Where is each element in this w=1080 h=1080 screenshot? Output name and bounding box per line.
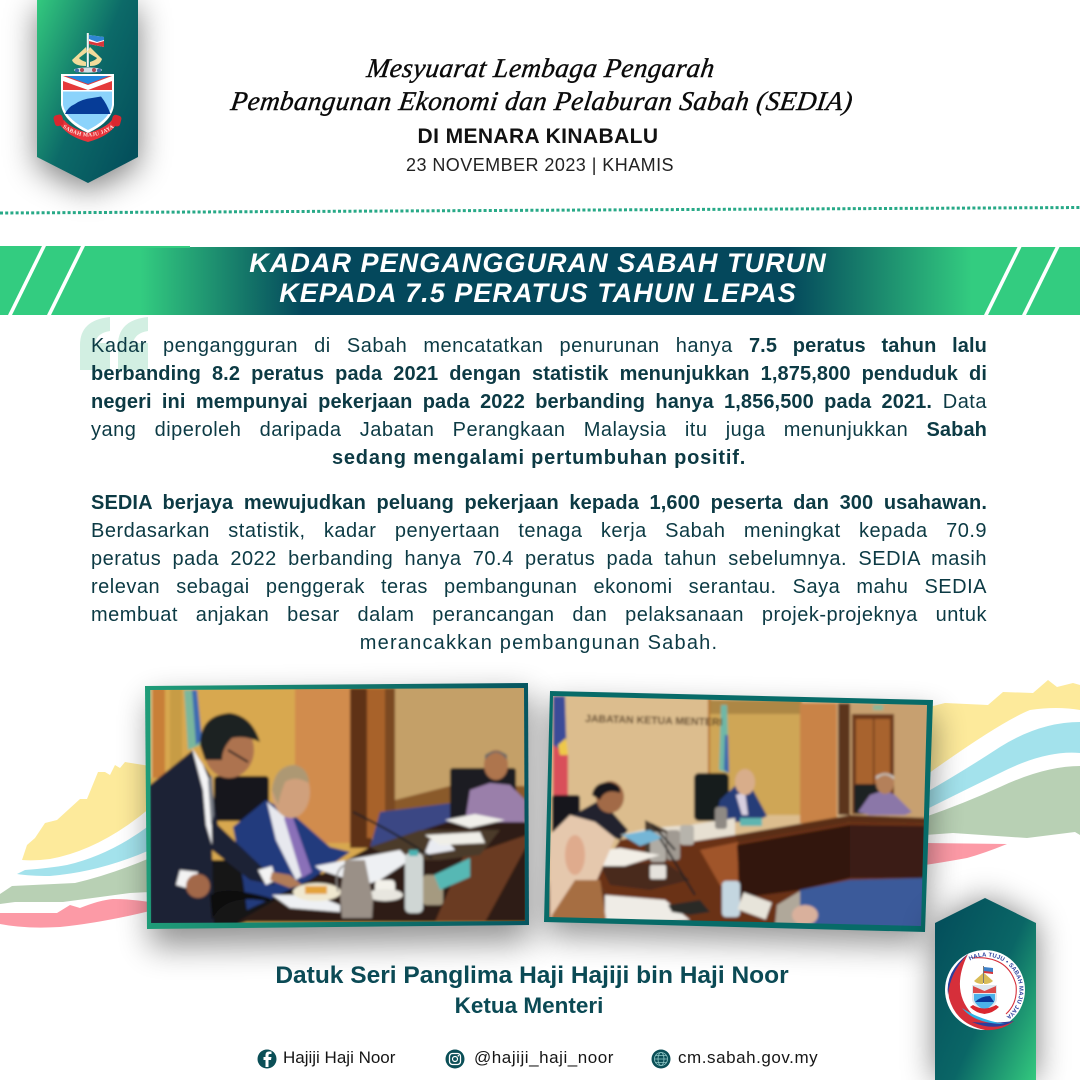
dotted divider (0, 208, 1080, 213)
photo 1 shadow (150, 695, 530, 947)
signature name: Datuk Seri Panglima Haji Hajiji bin Haji Noor (275, 962, 789, 989)
top ribbon with crest (14, 0, 161, 208)
paragraph 1: sedang mengalami pertumbuhan positif. (332, 447, 746, 469)
icon: Sabah crest (54, 33, 122, 142)
icon: quotation mark (80, 317, 148, 370)
left waves (0, 762, 150, 928)
website: cm.sabah.gov.my (678, 1048, 818, 1067)
title script lines: Pembangunan Ekonomi dan Pelaburan Sabah (SEDIA) (229, 86, 855, 116)
paragraph 1: berbanding 8.2 peratus pada 2021 dengan statistik menunjukkan 1,875,800 penduduk di (91, 363, 987, 385)
banner headline: KEPADA 7.5 PERATUS TAHUN LEPAS (279, 278, 797, 308)
photo 2: boardroom table (545, 690, 935, 930)
signature role: Ketua Menteri (455, 993, 603, 1018)
icon: Sabah crest: SABAH MAJU JAYA (63, 124, 114, 136)
date line: 23 NOVEMBER 2023 | KHAMIS (406, 155, 674, 175)
photo 2 shadow (545, 705, 935, 945)
paragraph 1: yang diperoleh daripada Jabatan Perangkaan Malaysia itu juga menunjukkan Sabah (91, 419, 987, 441)
paragraph 2 (91, 492, 987, 654)
icon: instagram (446, 1050, 464, 1068)
photo 1 frame (145, 683, 529, 929)
venue heading: DI MENARA KINABALU (418, 125, 658, 148)
paragraph 1: negeri ini mempunyai pekerjaan pada 2022 berbanding hanya 1,856,500 pada 2021. Data (91, 391, 987, 413)
icon: globe (652, 1050, 670, 1068)
paragraph 2: relevan sebagai penggerak teras pembangunan ekonomi serantau. Saya mahu SEDIA (91, 576, 987, 598)
bottom ribbon with seal (912, 881, 1059, 1080)
icon: facebook (258, 1050, 276, 1068)
paragraph 2: Berdasarkan statistik, kadar penyertaan tenaga kerja Sabah meningkat kepada 70.9 (91, 520, 987, 542)
paragraph 2: membuat anjakan besar dalam perancangan dan pelaksanaan projek-projeknya untuk (91, 604, 987, 626)
right waves (925, 680, 1080, 865)
instagram handle: @hajiji_haji_noor (474, 1048, 614, 1067)
banner headline (249, 248, 827, 308)
icon: Hala Tuju seal: HALA TUJU • SABAH MAJU JAYA (968, 952, 1024, 1019)
paragraph 1 (91, 335, 987, 469)
title banner (0, 246, 1080, 315)
paragraph 2: merancakkan pembangunan Sabah. (360, 632, 718, 654)
paragraph 2: SEDIA berjaya mewujudkan peluang pekerjaan kepada 1,600 peserta dan 300 usahawan. (91, 492, 987, 514)
paragraph 1: Kadar pengangguran di Sabah mencatatkan penurunan hanya 7.5 peratus tahun lalu (91, 335, 987, 357)
wall sign lettering: JABATAN KETUA MENTERI (585, 713, 723, 729)
banner headline: KADAR PENGANGGURAN SABAH TURUN (249, 248, 827, 278)
photo 2 frame (544, 691, 933, 932)
title script lines (229, 53, 855, 116)
facebook handle: Hajiji Haji Noor (283, 1048, 395, 1067)
paragraph 2: peratus pada 2022 berbanding hanya 70.4 peratus pada tahun sebelumnya. SEDIA masih (91, 548, 987, 570)
photo 1: meeting, chief minister seated (150, 685, 530, 925)
title script lines: Mesyuarat Lembaga Pengarah (365, 53, 717, 83)
icon: Hala Tuju seal (945, 950, 1025, 1030)
